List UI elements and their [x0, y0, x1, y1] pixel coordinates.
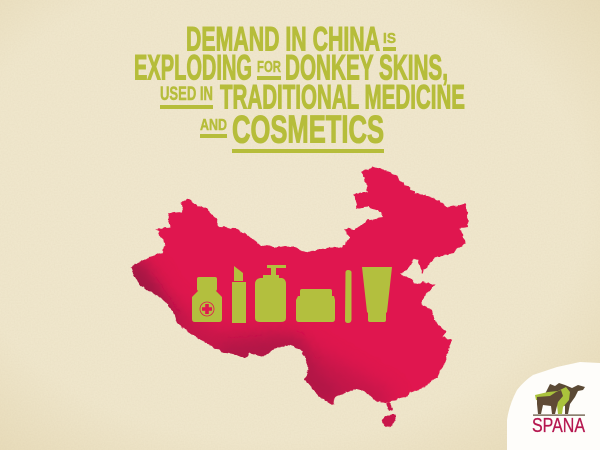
title line 4: AND — [200, 117, 227, 134]
SPANA logo — [507, 362, 600, 450]
logo wordmark: SPANA — [532, 415, 586, 437]
title line 4 — [200, 108, 384, 153]
logo baseline — [533, 414, 585, 416]
icon: lipstick — [232, 266, 246, 323]
mainland — [120, 160, 470, 415]
green camel — [535, 387, 570, 414]
brown donkey — [537, 390, 563, 414]
map of China — [120, 160, 470, 427]
title line 3 — [160, 78, 465, 116]
icon: eyeliner pencil — [345, 270, 352, 323]
brown camel — [545, 383, 585, 414]
product icons — [192, 265, 392, 323]
Hainan strait tip — [386, 403, 392, 411]
logo animals — [533, 383, 585, 416]
title line 1: DEMAND IN CHINA — [186, 20, 380, 58]
island of Hainan — [382, 414, 396, 427]
title line 2 — [134, 48, 448, 88]
logo white background — [507, 362, 600, 450]
icon: cream jar — [296, 289, 335, 322]
title line 2: FOR — [257, 59, 281, 76]
title line 2: DONKEY SKINS, — [285, 48, 448, 88]
title line 1: IS — [383, 30, 396, 47]
title line 3: USED IN — [160, 84, 213, 105]
title line 2: EXPLODING — [134, 48, 252, 88]
title — [134, 20, 465, 153]
icon: medicine bottle — [192, 277, 222, 322]
icon: pump bottle — [255, 265, 286, 322]
title line 4: COSMETICS — [232, 108, 384, 152]
icon: squeeze tube — [362, 267, 392, 322]
title line 1 — [186, 20, 396, 58]
